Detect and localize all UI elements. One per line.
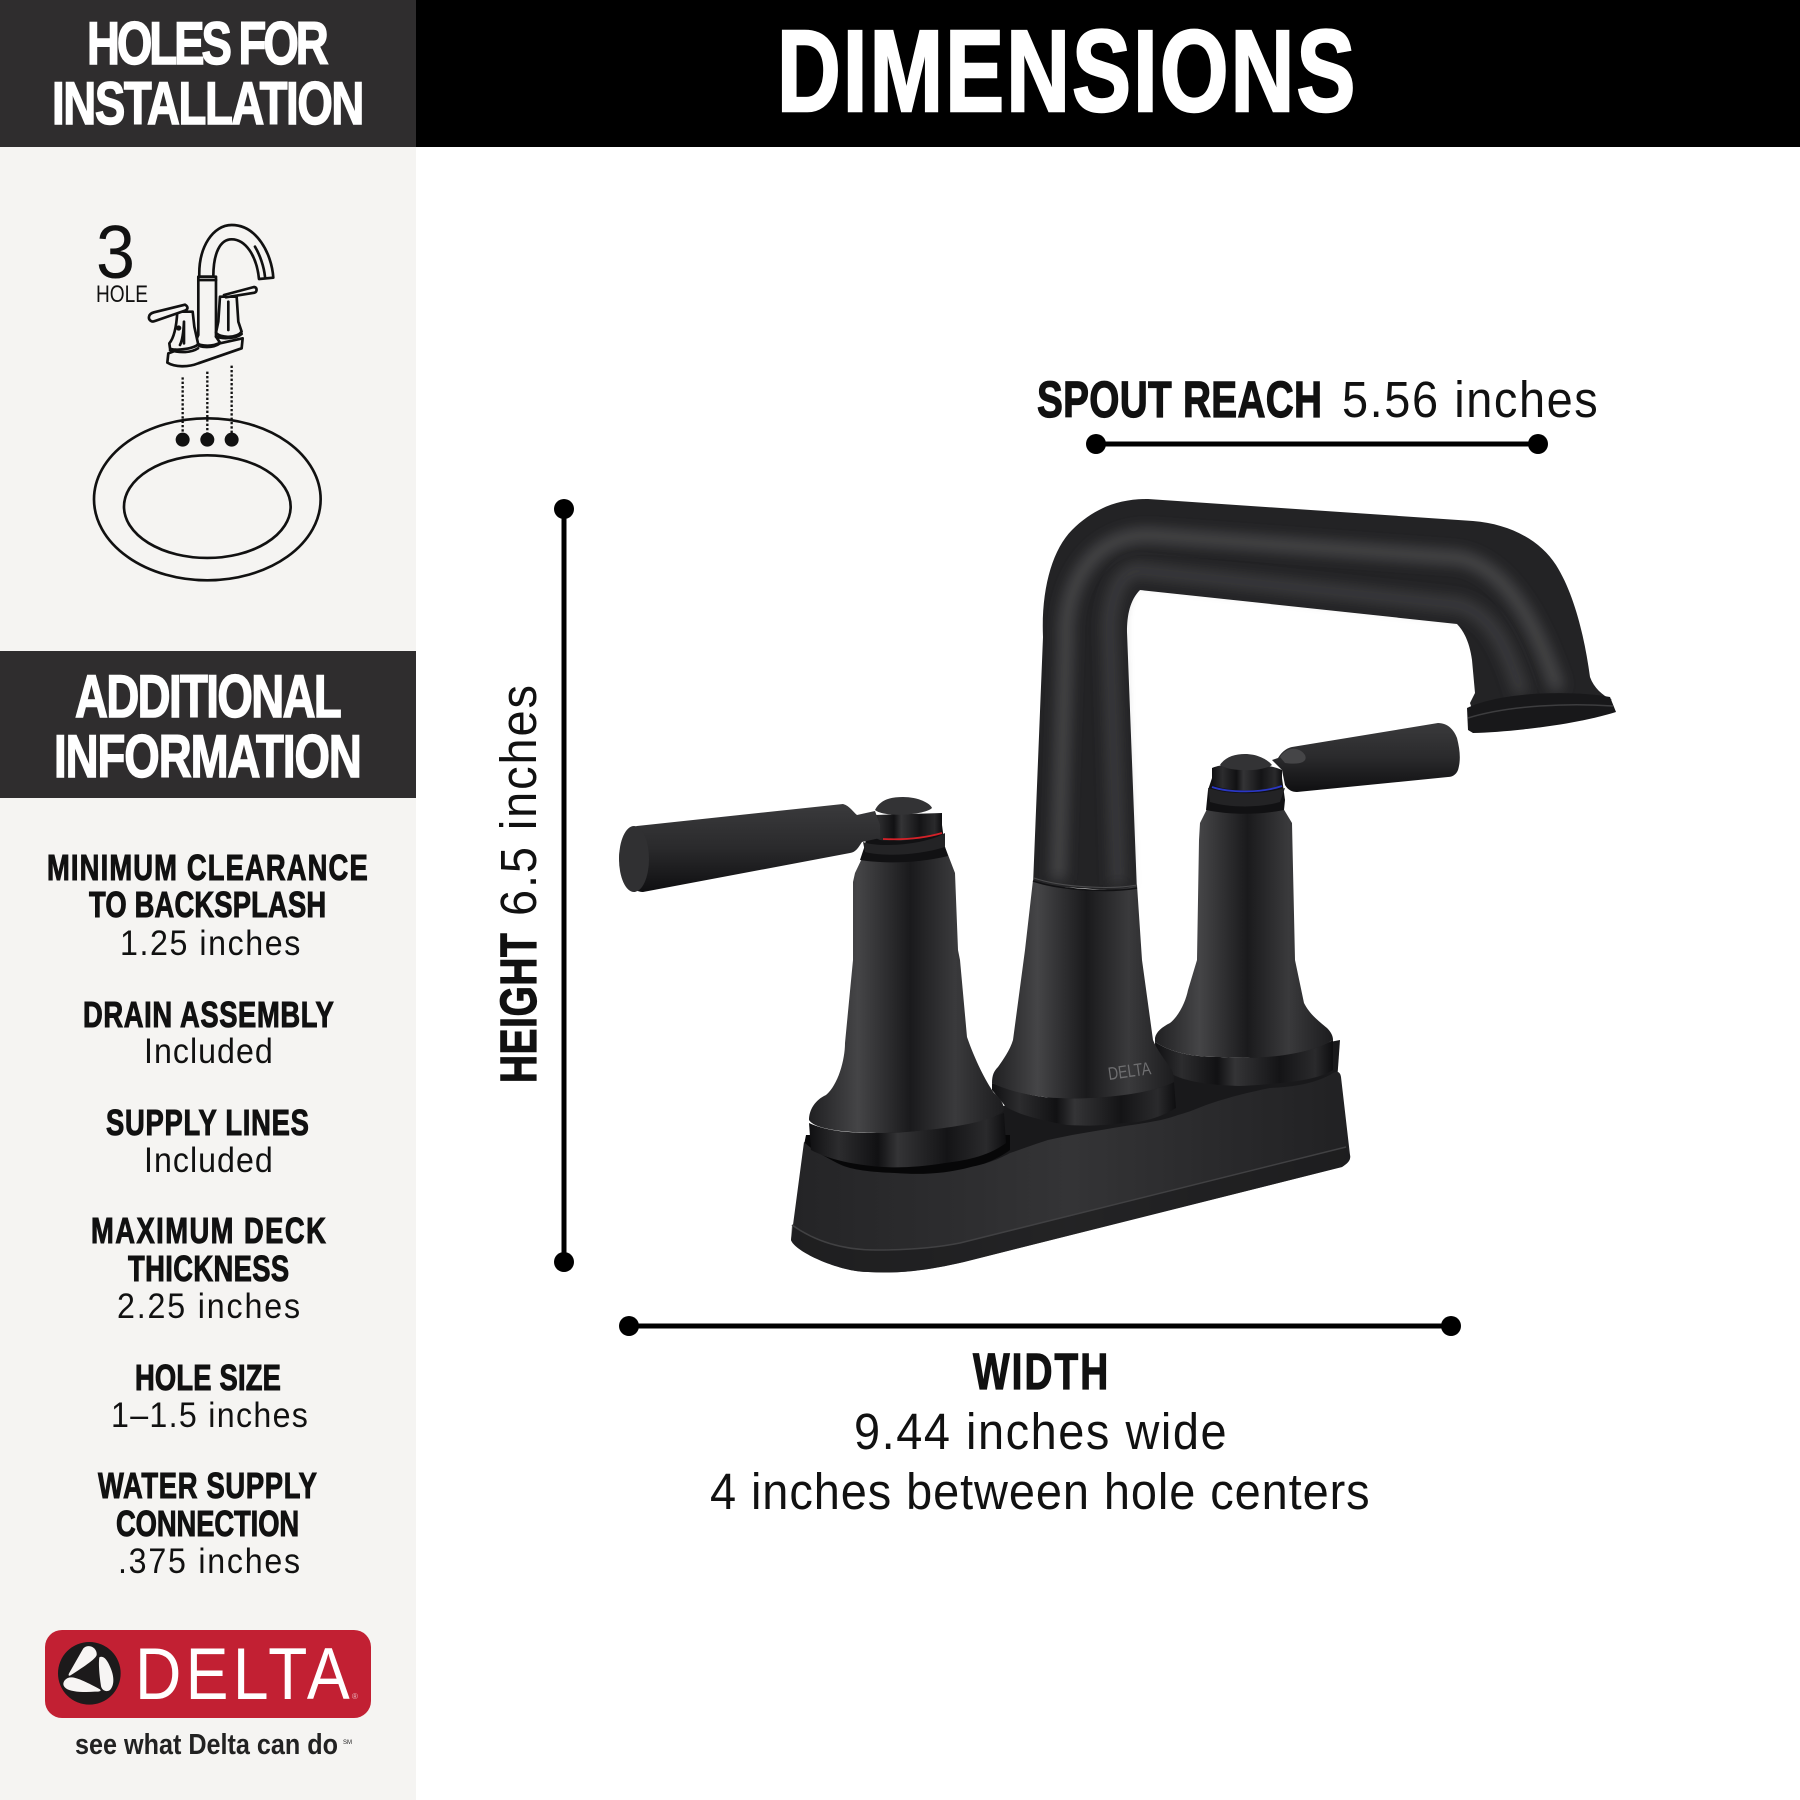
spec: drain assembly [83,994,334,1071]
label: 3 hole: 3 [96,210,135,294]
spec: minimum clearance: MINIMUM CLEARANCE [47,847,368,888]
faucet left valve [809,797,1006,1167]
spec: water supply connection: WATER SUPPLY [98,1465,317,1506]
icon: delta emblem [58,1642,121,1705]
faucet brand mark: DELTA [1107,1058,1152,1084]
spec: water supply connection: CONNECTION [116,1503,299,1544]
arrow: height line [554,499,574,1272]
spec: water supply connection: .375 inches [118,1543,300,1581]
arrow: width line [619,1316,1461,1336]
sidebar background [0,0,416,1800]
tagline: SM [343,1740,352,1746]
spec: hole size: 1–1.5 inches [111,1397,308,1435]
logo: delta: ® [352,1692,358,1701]
spec: maximum deck thickness: MAXIMUM DECK [91,1210,326,1251]
header: additional information [0,651,416,798]
dimension: width [619,1316,1461,1520]
dimension: height: 6.5 inches [491,685,547,916]
logo: delta: DELTA [135,1633,350,1715]
dimension: spout reach: SPOUT REACH [1037,371,1322,428]
faucet right valve [1155,754,1333,1086]
spec: maximum deck thickness: 2.25 inches [117,1288,300,1326]
dimension: width: 4 inches between hole centers [710,1464,1370,1520]
arrow: spout reach line [1086,434,1548,454]
header: holes for installation: HOLES FOR [87,11,329,78]
spec: supply lines [106,1102,309,1180]
faucet deck plate [791,1040,1350,1273]
dimension: spout reach: 5.56 inches [1342,372,1598,428]
icon: sink basin [94,366,321,580]
logo: delta [45,1630,371,1718]
label: 3 hole: HOLE [96,281,148,308]
spec: maximum deck thickness: THICKNESS [128,1248,289,1289]
title: dimensions: DIMENSIONS [777,6,1355,136]
spec: minimum clearance [47,847,368,963]
icon: line drawing faucet [149,225,273,366]
spec: hole size [111,1357,308,1435]
faucet left lever [619,804,880,892]
spec: supply lines: SUPPLY LINES [106,1102,309,1143]
tagline: see what Delta can do [75,1729,338,1761]
spec: water supply connection [98,1465,317,1581]
title: dimensions [416,0,1800,147]
header: holes for installation [0,0,416,147]
spec: maximum deck thickness [91,1210,326,1326]
dimension: height [490,499,574,1272]
dimension: height: HEIGHT [490,933,547,1083]
dimension: spout reach [1037,371,1598,454]
header: additional information: INFORMATION [54,724,362,791]
spec: supply lines: Included [144,1142,273,1180]
product: matte black faucet [619,499,1616,1273]
icon: three hole installation [94,210,321,580]
label: 3 hole [96,210,148,308]
spec: drain assembly: Included [144,1033,273,1071]
dimension: width: 9.44 inches wide [854,1404,1227,1460]
faucet center base [992,878,1176,1126]
faucet spout [1033,499,1616,892]
spec: hole size: HOLE SIZE [135,1357,281,1398]
faucet right lever [1272,723,1460,792]
spec: minimum clearance: 1.25 inches [120,925,300,963]
header: additional information: ADDITIONAL [75,664,342,731]
spec: minimum clearance: TO BACKSPLASH [89,884,326,925]
header: holes for installation: INSTALLATION [52,71,364,138]
spec: drain assembly: DRAIN ASSEMBLY [83,994,334,1035]
dimension: width: WIDTH [973,1343,1108,1400]
